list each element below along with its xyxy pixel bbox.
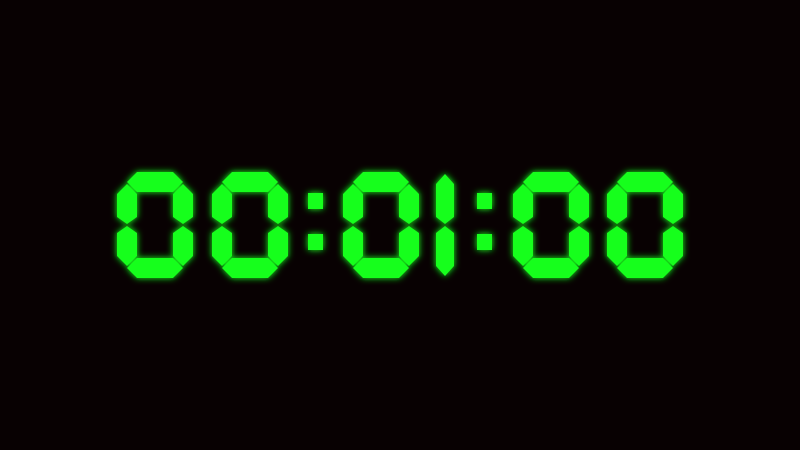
digit: hours ones 0 bbox=[212, 172, 288, 278]
digit: hours tens 0 bbox=[117, 172, 193, 278]
colon 1 bbox=[308, 193, 323, 250]
time digits 00:01:00 bbox=[117, 172, 683, 278]
digit: seconds tens 0 bbox=[513, 172, 589, 278]
digit: minutes tens 0 bbox=[343, 172, 419, 278]
colon 2 bbox=[477, 193, 492, 250]
digit: seconds ones 0 bbox=[607, 172, 683, 278]
digit: minutes ones 1 bbox=[436, 174, 454, 276]
